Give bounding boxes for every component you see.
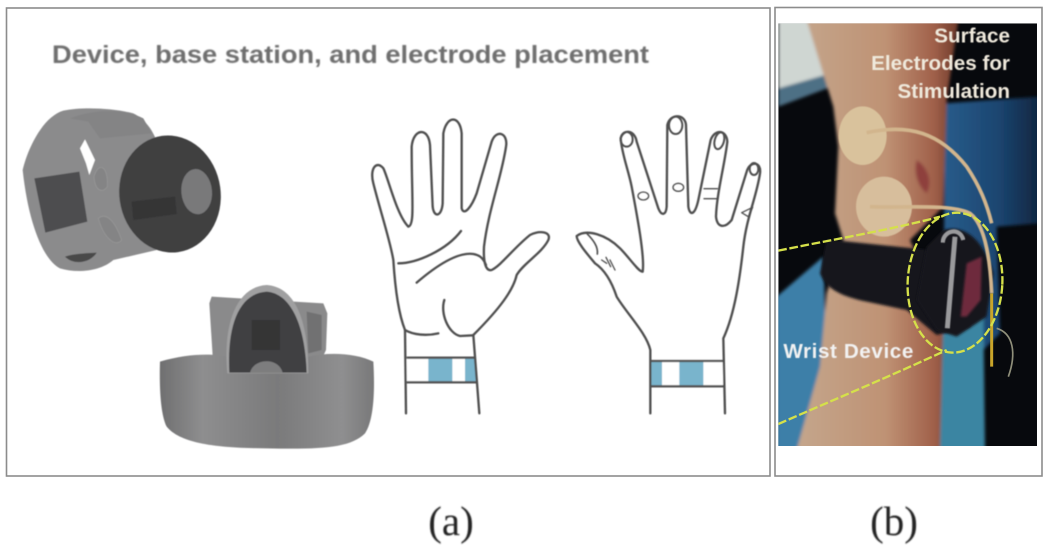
caption (a): (a) bbox=[428, 498, 474, 544]
photo labels: Electrodes for bbox=[871, 52, 1010, 75]
icon: base station bbox=[160, 285, 374, 449]
heading: Device, base station, and electrode placement bbox=[52, 41, 650, 69]
electrodes bbox=[839, 106, 887, 165]
icon: wrist device bbox=[23, 108, 228, 271]
icon: right hand back with electrodes bbox=[577, 116, 760, 413]
wristband bbox=[820, 239, 970, 335]
panel: (b) photo of wrist device bbox=[775, 8, 1042, 476]
electrode band bbox=[651, 361, 724, 386]
photo bbox=[777, 20, 1040, 450]
electrode wires bbox=[867, 129, 992, 293]
device clip bbox=[943, 231, 963, 328]
photo labels: Surface bbox=[934, 25, 1010, 48]
photo labels bbox=[783, 25, 1010, 363]
caption (b): (b) bbox=[870, 498, 918, 544]
yellow dashed callout bbox=[778, 210, 1006, 424]
hand outline bbox=[577, 116, 760, 413]
icon: left hand palm with electrodes bbox=[372, 120, 549, 413]
electrode band bbox=[407, 358, 477, 382]
panel: (a) device and placement bbox=[6, 8, 770, 476]
photo labels: Wrist Device bbox=[783, 340, 913, 363]
photo background regions bbox=[778, 20, 828, 90]
photo labels: Stimulation bbox=[898, 80, 1010, 103]
hand outline bbox=[372, 120, 549, 413]
forearm bbox=[797, 20, 958, 450]
